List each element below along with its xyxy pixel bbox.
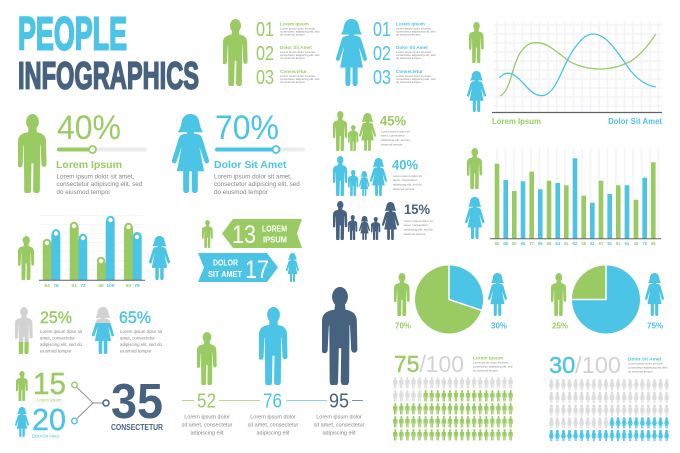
bars bbox=[43, 218, 142, 280]
label consectetur: CONSECTETUR bbox=[111, 423, 163, 432]
icon: woman bbox=[336, 19, 367, 86]
list item 01 bbox=[373, 19, 436, 41]
pie bbox=[415, 265, 483, 334]
icon: man bbox=[18, 236, 34, 281]
green ribbon bbox=[222, 219, 302, 248]
body text: amet, consectetur bbox=[40, 336, 75, 340]
label 75: 75% bbox=[647, 322, 663, 330]
list item 01: do eiusmod tempor bbox=[396, 32, 421, 36]
list item 03: consectetur adipiscing elit, sed bbox=[396, 77, 436, 81]
panel: small bar chart bbox=[18, 216, 170, 289]
body text: consectetur adipiscing elit, sed bbox=[56, 181, 143, 188]
caption 2: sit amet, consectetur bbox=[248, 422, 299, 428]
body text: Lorem ipsum dolor sit bbox=[404, 219, 433, 223]
list item 01: do eiusmod tempor bbox=[280, 32, 305, 36]
list item 03 bbox=[373, 67, 436, 89]
body text: adipiscing elit, sed do bbox=[404, 228, 433, 232]
body text: eiusmod tempor bbox=[381, 142, 403, 146]
label lorem ipsum: Lorem Ipsum bbox=[37, 398, 62, 402]
icon: man bbox=[467, 148, 482, 190]
icon: woman bbox=[465, 197, 485, 239]
label 30: 30% bbox=[491, 322, 507, 330]
icon: man bbox=[469, 22, 484, 64]
panel: ribbons bbox=[198, 219, 302, 284]
panel: man numbered list bbox=[223, 19, 320, 89]
bar value labels: 77 bbox=[529, 241, 535, 246]
list item 02: Lorem ipsum dolor sit amet, bbox=[396, 50, 432, 54]
bar value labels: 61 bbox=[564, 241, 569, 246]
legend: lorem ipsum: Lorem Ipsum bbox=[492, 117, 541, 126]
title bbox=[18, 8, 199, 98]
list item 03: consectetur adipiscing elit, sed bbox=[280, 77, 320, 81]
icon: small man bbox=[197, 332, 217, 386]
list item 02: Dolor Sit Amet bbox=[280, 45, 312, 50]
green line bbox=[500, 34, 656, 96]
bar value labels: 55 bbox=[512, 241, 517, 246]
panel: pie chart 70 30 bbox=[394, 265, 507, 334]
body text: do eiusmod tempor bbox=[628, 370, 653, 374]
body text: do eiusmod tempor bbox=[56, 189, 110, 196]
bar value labels: 65 bbox=[521, 241, 526, 246]
icon: woman bbox=[172, 114, 209, 193]
bar value labels: 51 bbox=[607, 241, 613, 246]
body text bbox=[628, 362, 668, 374]
icons: family bbox=[333, 111, 376, 152]
icon: man bbox=[202, 220, 213, 248]
caption 1: Lorem ipsum dolor bbox=[184, 414, 230, 420]
bar value labels: 41 bbox=[590, 241, 595, 246]
list item 02: do eiusmod tempor bbox=[396, 56, 421, 60]
blue ribbon bbox=[198, 253, 278, 282]
list item 01: Lorem ipsum dolor sit amet, bbox=[280, 26, 316, 30]
pictogram grid bbox=[549, 379, 669, 441]
panel: 65 percent woman bbox=[92, 307, 163, 354]
heading: Lorem Ipsum bbox=[473, 356, 503, 362]
percent: 25% bbox=[40, 308, 72, 327]
percent: 40% bbox=[57, 109, 121, 147]
ribbon text 17: 17 bbox=[245, 256, 269, 284]
body text: Lorem ipsum dolor sit amet, bbox=[628, 362, 664, 366]
ribbon label dolor sit amet bbox=[208, 258, 242, 279]
list item 03: do eiusmod tempor bbox=[280, 80, 305, 84]
icon: man bbox=[394, 273, 410, 317]
icon: man bbox=[18, 114, 47, 194]
ribbon label lorem ipsum: LOREM bbox=[262, 224, 287, 234]
icon: partially filled woman bbox=[92, 307, 114, 354]
total 35: 35 bbox=[111, 375, 163, 429]
icon: woman bbox=[488, 273, 507, 316]
icon: large man bbox=[321, 287, 357, 386]
label 70: 70% bbox=[395, 322, 411, 330]
connector bbox=[72, 382, 109, 424]
icon: woman bbox=[467, 71, 486, 112]
bar value labels: 86 bbox=[495, 241, 500, 246]
icon: man bbox=[551, 273, 566, 317]
icon: woman bbox=[645, 273, 664, 316]
list item 01: Lorem Ipsum bbox=[396, 22, 425, 26]
list item 03 bbox=[256, 67, 320, 89]
body text bbox=[404, 219, 433, 236]
bar value labels: 79 bbox=[53, 283, 59, 289]
panel: family 45 percent bbox=[333, 111, 410, 152]
caption 2 bbox=[248, 414, 299, 436]
legend: dolor sit amet: Dolor Sit Amet bbox=[608, 117, 662, 126]
body text: eiusmod tempor bbox=[120, 348, 152, 354]
body text: Lorem ipsum dolor sit amet, bbox=[473, 360, 509, 364]
body text: eiusmod tempor bbox=[40, 348, 72, 354]
ribbon label lorem ipsum bbox=[262, 224, 287, 244]
body text: do eiusmod tempor bbox=[473, 368, 498, 372]
bar value labels: 72 bbox=[80, 283, 86, 289]
panel: 75 of 100 bbox=[393, 351, 513, 441]
body text: eiusmod tempor bbox=[404, 232, 426, 236]
body text: adipiscing elit, sed do bbox=[393, 182, 422, 186]
body text bbox=[381, 130, 410, 146]
body text: Lorem ipsum dolor sit amet, bbox=[214, 174, 292, 180]
panel: bar chart large bbox=[465, 148, 661, 246]
list item 01: 01 bbox=[256, 19, 274, 41]
slider bbox=[57, 146, 147, 153]
bar value labels: 67 bbox=[599, 241, 604, 246]
pie bbox=[571, 265, 640, 334]
bar value labels: 91 bbox=[71, 283, 77, 289]
icon: man bbox=[223, 19, 248, 87]
list item 03: Consectetur bbox=[280, 69, 307, 74]
label dolor sit amet: Dolor Sit Amet bbox=[32, 434, 60, 438]
caption 1 bbox=[182, 414, 233, 436]
caption 1: adipiscing elit bbox=[190, 430, 224, 436]
fraction: 30/100 bbox=[549, 352, 621, 378]
number 76: 76 bbox=[263, 390, 282, 412]
list item 01 bbox=[256, 19, 320, 41]
number 20: 20 bbox=[32, 402, 66, 437]
ribbon label dolor sit amet: DOLOR bbox=[213, 258, 238, 268]
body text bbox=[214, 174, 300, 196]
body text bbox=[393, 174, 422, 191]
body text: amet, consectetur bbox=[404, 223, 428, 227]
bar markers bbox=[44, 217, 140, 264]
body text: amet, consectetur bbox=[381, 134, 405, 138]
label 25: 25% bbox=[552, 322, 568, 330]
percent: 15% bbox=[404, 201, 431, 217]
body text bbox=[120, 329, 163, 354]
icon: man bbox=[16, 371, 28, 401]
list item 02 bbox=[373, 43, 436, 65]
icon: woman bbox=[286, 253, 299, 282]
panel: 30 of 100 bbox=[549, 352, 669, 441]
panel: 70 percent woman bbox=[172, 109, 305, 196]
percent: 45% bbox=[380, 112, 407, 128]
body text: amet, consectetur bbox=[393, 178, 417, 182]
percent: 65% bbox=[119, 308, 151, 327]
body text: Lorem ipsum dolor sit bbox=[120, 329, 163, 334]
bar value labels: 92 bbox=[573, 241, 578, 246]
heading: Dolor Sit Amet bbox=[214, 159, 287, 171]
caption 3: Lorem ipsum dolor bbox=[316, 414, 362, 420]
icons: family bbox=[333, 156, 387, 196]
body text: consectetur adipiscing elit, sed bbox=[628, 366, 668, 370]
list item 01: 01 bbox=[373, 19, 391, 41]
list item 03: Lorem ipsum dolor sit amet, bbox=[396, 74, 432, 78]
body text: Lorem ipsum dolor sit amet, bbox=[56, 174, 134, 180]
list item 02: consectetur adipiscing elit, sed bbox=[280, 53, 320, 57]
body text: adipiscing elit, sed do bbox=[381, 138, 410, 142]
body text: amet, consectetur bbox=[120, 336, 155, 340]
bars bbox=[495, 158, 656, 239]
slider bbox=[215, 146, 305, 153]
heading: Lorem Ipsum bbox=[56, 159, 122, 171]
list item 02: Dolor Sit Amet bbox=[396, 45, 428, 50]
ribbon label lorem ipsum: IPSUM bbox=[263, 236, 287, 244]
bar value labels: 68 bbox=[503, 241, 509, 246]
bar value labels bbox=[495, 241, 656, 246]
bar value labels: 100 bbox=[106, 283, 115, 289]
title: INFOGRAPHICS bbox=[18, 56, 199, 98]
body text: adipiscing elit, sed do bbox=[120, 342, 163, 347]
list item 01: consectetur adipiscing elit, sed bbox=[280, 30, 320, 34]
panel: family 40 percent bbox=[333, 156, 422, 196]
bar value labels: 61 bbox=[625, 241, 630, 246]
number 52: 52 bbox=[197, 390, 216, 412]
bar value labels: 88 bbox=[651, 241, 656, 246]
list item 02: 02 bbox=[373, 43, 391, 65]
list item 03: Lorem ipsum dolor sit amet, bbox=[280, 74, 316, 78]
bar value labels: 93 bbox=[126, 283, 131, 289]
ribbon text 13: 13 bbox=[232, 221, 256, 249]
bar value labels: 66 bbox=[547, 241, 552, 246]
body text bbox=[473, 360, 513, 372]
panel: line chart bbox=[467, 22, 662, 126]
list item 03: 03 bbox=[373, 67, 391, 89]
panel: pie chart 25 75 bbox=[551, 265, 664, 334]
icon: woman bbox=[15, 407, 29, 437]
bar value labels: 56 bbox=[538, 241, 543, 246]
body text bbox=[56, 174, 143, 196]
panel: woman numbered list bbox=[336, 19, 436, 89]
caption 3: adipiscing elit bbox=[322, 430, 356, 436]
body text: adipiscing elit, sed do bbox=[40, 342, 83, 347]
number 15: 15 bbox=[33, 366, 66, 401]
list item 03: do eiusmod tempor bbox=[396, 80, 421, 84]
icons: family bbox=[333, 201, 399, 240]
panel: 40 percent man bbox=[18, 109, 147, 196]
body text bbox=[40, 329, 83, 354]
body text: Lorem ipsum dolor sit bbox=[381, 130, 410, 134]
bar value labels: 64 bbox=[555, 241, 561, 246]
icon: medium man bbox=[259, 307, 288, 386]
list item 01: consectetur adipiscing elit, sed bbox=[396, 30, 436, 34]
icon: partially filled man bbox=[15, 307, 33, 355]
list item 02: do eiusmod tempor bbox=[280, 56, 305, 60]
panel: 25 percent man bbox=[15, 307, 83, 355]
panel: sum diagram bbox=[15, 366, 163, 438]
list item 02: 02 bbox=[256, 43, 274, 65]
panel: height comparison bbox=[182, 287, 365, 436]
ribbon label dolor sit amet: SIT AMET bbox=[208, 270, 242, 279]
title: PEOPLE bbox=[18, 8, 127, 60]
list item 02: consectetur adipiscing elit, sed bbox=[396, 53, 436, 57]
bar value labels: 64 bbox=[44, 283, 50, 289]
caption 2: adipiscing elit bbox=[256, 430, 290, 436]
body text: Lorem ipsum dolor sit bbox=[40, 329, 83, 334]
body text: Lorem ipsum dolor sit bbox=[393, 174, 422, 178]
list item 02 bbox=[256, 43, 320, 65]
icon: woman bbox=[149, 236, 170, 280]
caption 3: sit amet, consectetur bbox=[314, 422, 365, 428]
bar value labels: 49 bbox=[581, 241, 587, 246]
panel: family 15 percent bbox=[333, 201, 433, 240]
bar value labels: 61 bbox=[616, 241, 621, 246]
bar value labels bbox=[44, 283, 140, 289]
number 95: 95 bbox=[329, 390, 349, 412]
caption 2: Lorem ipsum dolor bbox=[250, 414, 296, 420]
list item 03: 03 bbox=[256, 67, 274, 89]
heading: Dolor Sit Amet bbox=[628, 356, 662, 362]
list item 03: Consectetur bbox=[396, 69, 423, 74]
percent: 40% bbox=[392, 156, 419, 172]
caption 1: sit amet, consectetur bbox=[182, 422, 233, 428]
list item 02: Lorem ipsum dolor sit amet, bbox=[280, 50, 316, 54]
body text: do eiusmod tempor bbox=[214, 189, 268, 196]
body text: consectetur adipiscing elit, sed bbox=[473, 364, 513, 368]
caption 3 bbox=[314, 414, 365, 436]
bar value labels: 45 bbox=[634, 241, 639, 246]
bar value labels: 70 bbox=[642, 241, 648, 246]
blue line bbox=[499, 34, 656, 96]
percent: 70% bbox=[215, 109, 279, 147]
list item 01: Lorem Ipsum bbox=[280, 22, 309, 26]
list item 01: Lorem ipsum dolor sit amet, bbox=[396, 26, 432, 30]
bar value labels: 36 bbox=[98, 283, 104, 289]
bar value labels: 76 bbox=[134, 283, 140, 289]
body text: consectetur adipiscing elit, sed bbox=[214, 181, 300, 188]
fraction: 75/100 bbox=[394, 351, 464, 377]
body text: eiusmod tempor bbox=[393, 187, 415, 191]
pictogram grid bbox=[393, 377, 513, 441]
